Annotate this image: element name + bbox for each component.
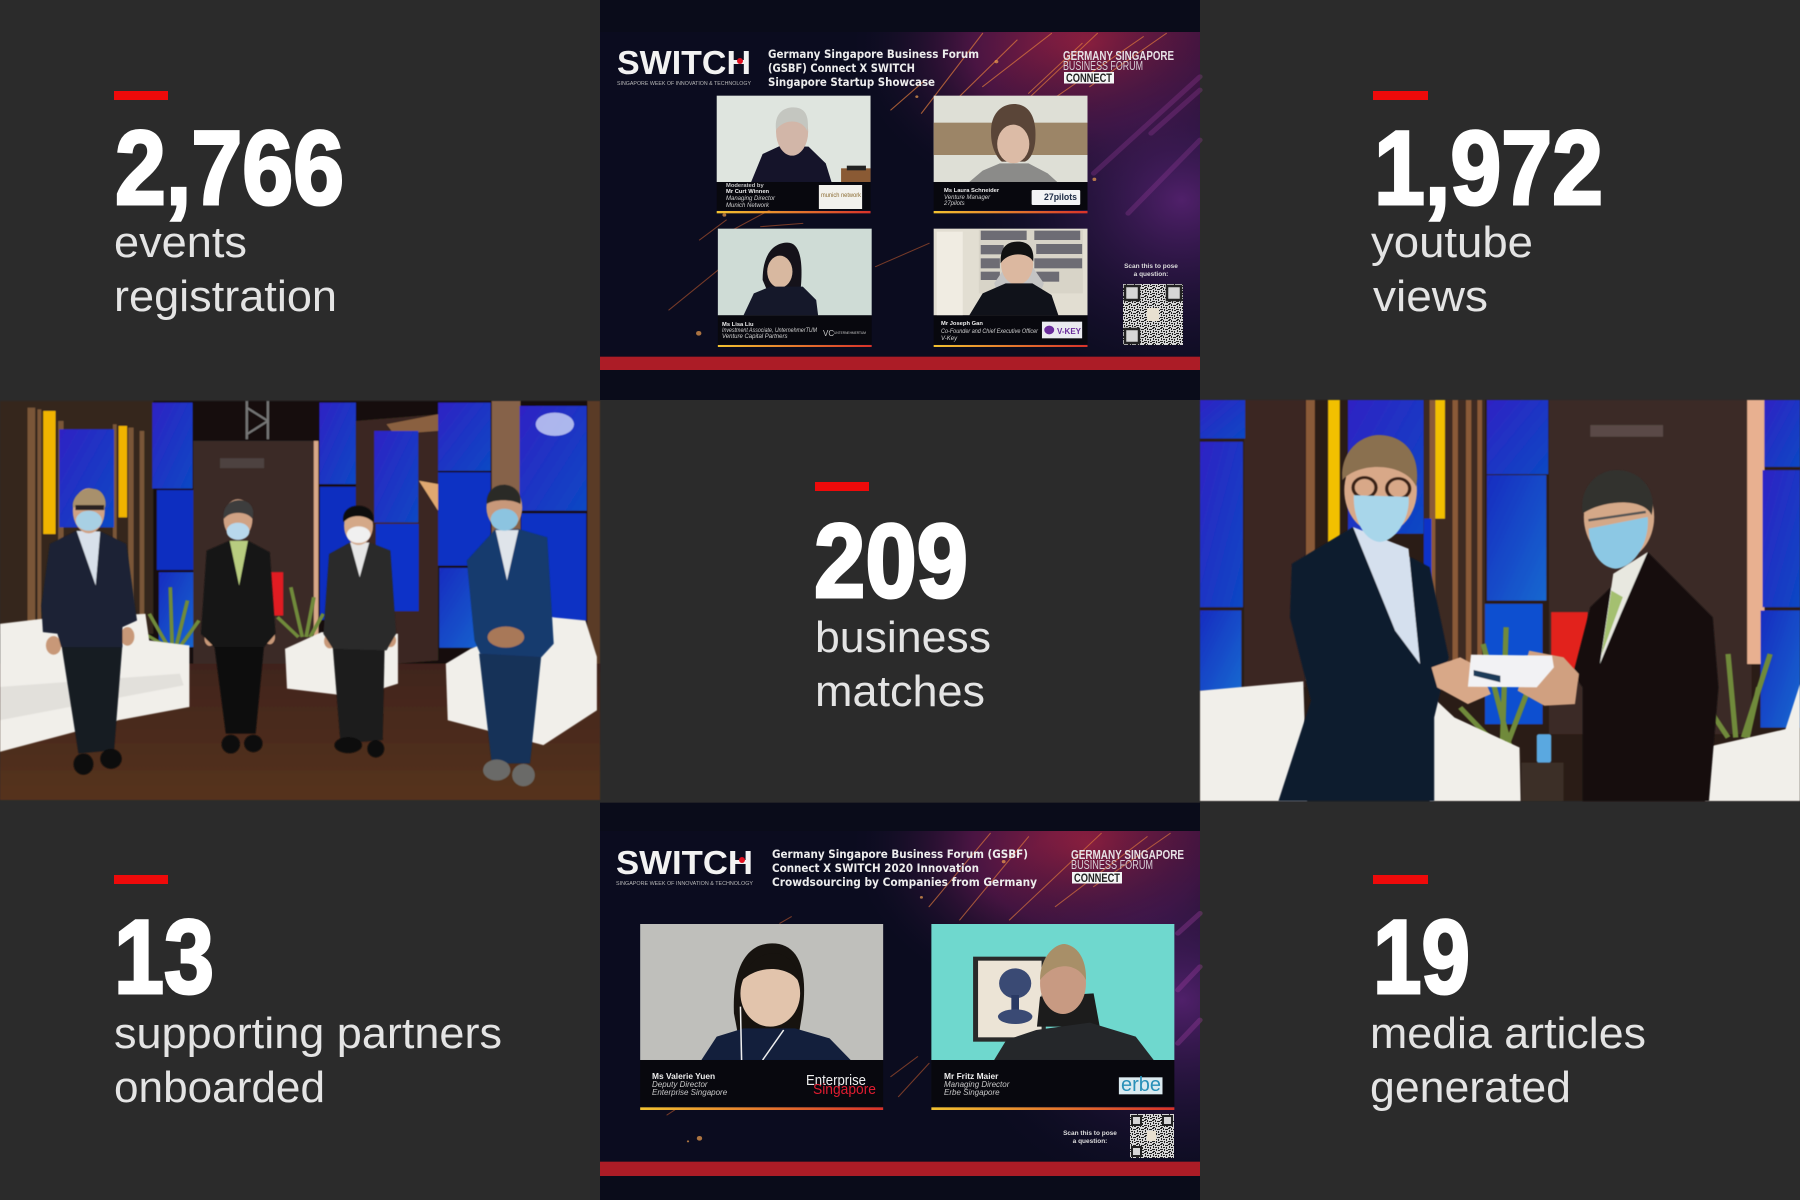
scan prompt: [1124, 263, 1178, 278]
slide title: Crowdsourcing by Companies from Germany: [772, 875, 1037, 889]
speaker captions: Mr Fritz Maier: [944, 1071, 999, 1081]
Enterprise Singapore logo: Enterprise: [806, 1072, 866, 1089]
label: business matches: matches: [815, 667, 985, 716]
label: media articles generated: media articles: [1370, 1009, 1646, 1058]
label: youtube views: youtube: [1371, 218, 1533, 267]
slide artwork: [600, 0, 1200, 400]
Germany Singapore Business Forum Connect logo: BUSINESS FORUM: [1071, 858, 1153, 872]
scan prompt: Scan this to pose: [1063, 1130, 1117, 1137]
slide title: Germany Singapore Business Forum: [768, 47, 979, 61]
speaker captions: Enterprise Singapore: [652, 1088, 728, 1097]
speaker captions: Venture Manager: [944, 195, 991, 201]
Germany Singapore Business Forum Connect logo: [1063, 48, 1174, 85]
red accent bar: [1373, 91, 1428, 100]
label: media articles generated: generated: [1370, 1063, 1571, 1112]
water bottle and table: [1521, 734, 1564, 801]
video: Fritz Maier: [931, 924, 1174, 1110]
speaker captions: Investment Associate, UnternehmerTUM: [722, 328, 817, 334]
label: youtube views: [1371, 218, 1533, 321]
white sofas: [1200, 681, 1800, 801]
Germany Singapore Business Forum Connect logo: BUSINESS FORUM: [1063, 59, 1143, 73]
speaker captions: Managing Director: [944, 1080, 1010, 1089]
Germany Singapore Business Forum Connect logo: CONNECT: [1066, 73, 1112, 85]
speaker captions: munich network: [821, 192, 862, 199]
SWITCH logo: SWITCH: [617, 44, 751, 81]
panel: events registration stat: [114, 91, 344, 321]
speaker captions: Mr Joseph Gan: [941, 321, 983, 327]
video: Joseph Gan: [934, 229, 1087, 347]
SWITCH logo: SINGAPORE WEEK OF INNOVATION & TECHNOLOGY: [616, 881, 754, 887]
erbe logo: erbe: [1121, 1074, 1161, 1096]
slide title: (GSBF) Connect X SWITCH: [768, 61, 915, 75]
number: 19: 19: [1373, 899, 1470, 1016]
video: Laura Schneider: [934, 96, 1087, 213]
speaker captions: V-KEY: [1057, 327, 1082, 336]
speaker captions: [722, 183, 1082, 342]
label: events registration: [114, 218, 337, 321]
SWITCH logo: SWITCH: [616, 844, 753, 881]
label: events registration: events: [114, 218, 247, 267]
red accent bar: [1373, 875, 1428, 884]
Germany Singapore Business Forum Connect logo: [1071, 847, 1184, 885]
speaker captions: Ms Lisa Liu: [722, 322, 754, 328]
speaker captions: Moderated by: [726, 183, 764, 189]
slide title: [768, 47, 979, 89]
label: supporting partners onboarded: onboarded: [114, 1063, 325, 1112]
speaker captions: V-Key: [941, 336, 958, 342]
label: supporting partners onboarded: supporting partners: [114, 1009, 502, 1058]
slide title: [772, 847, 1037, 889]
speaker captions: 27pilots: [1044, 192, 1077, 202]
speaker captions: [652, 1071, 1010, 1097]
man on right: [1518, 470, 1718, 801]
number: 1,972: 1,972: [1374, 110, 1603, 227]
panel: supporting partners stat: [114, 875, 502, 1112]
label: media articles generated: [1370, 1009, 1646, 1112]
panel: media articles stat: [1370, 875, 1646, 1112]
speaker captions: Deputy Director: [652, 1080, 708, 1089]
number: 2,766: 2,766: [115, 110, 344, 227]
speaker captions: Co-Founder and Chief Executive Officer: [941, 329, 1039, 335]
Enterprise Singapore logo: Singapore: [813, 1081, 876, 1098]
SWITCH logo: SINGAPORE WEEK OF INNOVATION & TECHNOLOGY: [617, 81, 752, 87]
panel: top webinar screenshot: [600, 0, 1200, 400]
person 1: [41, 488, 137, 775]
video: Curt Winnen: [717, 96, 871, 213]
speaker captions: UNTERNEHMERTUM: [834, 331, 866, 335]
video: Lisa Liu: [718, 229, 872, 347]
speaker captions: 27pilots: [943, 201, 965, 207]
studio background: [1200, 400, 1800, 801]
red accent bar: [815, 482, 869, 491]
QR code: [1130, 1114, 1174, 1158]
slide title: Connect X SWITCH 2020 Innovation: [772, 861, 979, 875]
man on left: [1278, 435, 1491, 801]
Germany Singapore Business Forum Connect logo: GERMANY SINGAPORE: [1071, 847, 1184, 862]
number: 13: 13: [114, 899, 214, 1016]
photo: four guests standing on studio set: [0, 401, 600, 800]
speaker captions: Munich Network: [726, 203, 770, 209]
label: business matches: business: [815, 613, 991, 662]
label: youtube views: views: [1373, 272, 1488, 321]
sofa and armchairs: [0, 614, 597, 752]
number: 209: 209: [814, 503, 968, 620]
speaker captions: Erbe Singapore: [944, 1088, 1000, 1097]
label: supporting partners onboarded: [114, 1009, 502, 1112]
red accent bar: [114, 875, 168, 884]
person 2: [201, 499, 276, 753]
plants: [147, 587, 323, 647]
red accent bar: [114, 91, 168, 100]
gift box: [1468, 655, 1554, 687]
Enterprise Singapore logo: [806, 1072, 876, 1098]
scan prompt: [1063, 1130, 1117, 1145]
studio background: [0, 401, 600, 800]
label: events registration: registration: [114, 272, 337, 321]
label: business matches: [815, 613, 991, 716]
speaker captions: Ms Valerie Yuen: [652, 1071, 715, 1081]
speaker captions: VC: [823, 329, 834, 338]
speaker captions: Venture Capital Partners: [722, 334, 787, 340]
scan prompt: a question:: [1134, 271, 1168, 278]
photo: gift presentation between two guests: [1200, 400, 1800, 801]
speaker captions: Ms Laura Schneider: [944, 188, 1000, 194]
person 4: [467, 485, 554, 786]
scan prompt: Scan this to pose: [1124, 263, 1178, 270]
QR code: [1123, 284, 1183, 345]
slide artwork: [600, 800, 1200, 1200]
panel: business matches stat: [814, 482, 991, 716]
Germany Singapore Business Forum Connect logo: CONNECT: [1074, 873, 1120, 885]
panel: bottom webinar screenshot: [600, 800, 1200, 1200]
speaker captions: Managing Director: [726, 196, 776, 202]
panel: youtube views stat: [1371, 91, 1603, 321]
person 3: [323, 506, 396, 757]
speaker captions: Mr Curt Winnen: [726, 189, 770, 195]
slide title: Singapore Startup Showcase: [768, 75, 935, 89]
scan prompt: a question:: [1073, 1138, 1107, 1145]
Germany Singapore Business Forum Connect logo: GERMANY SINGAPORE: [1063, 48, 1174, 63]
slide title: Germany Singapore Business Forum (GSBF): [772, 847, 1028, 861]
plants: [1460, 627, 1770, 748]
video: Valerie Yuen: [640, 924, 883, 1110]
